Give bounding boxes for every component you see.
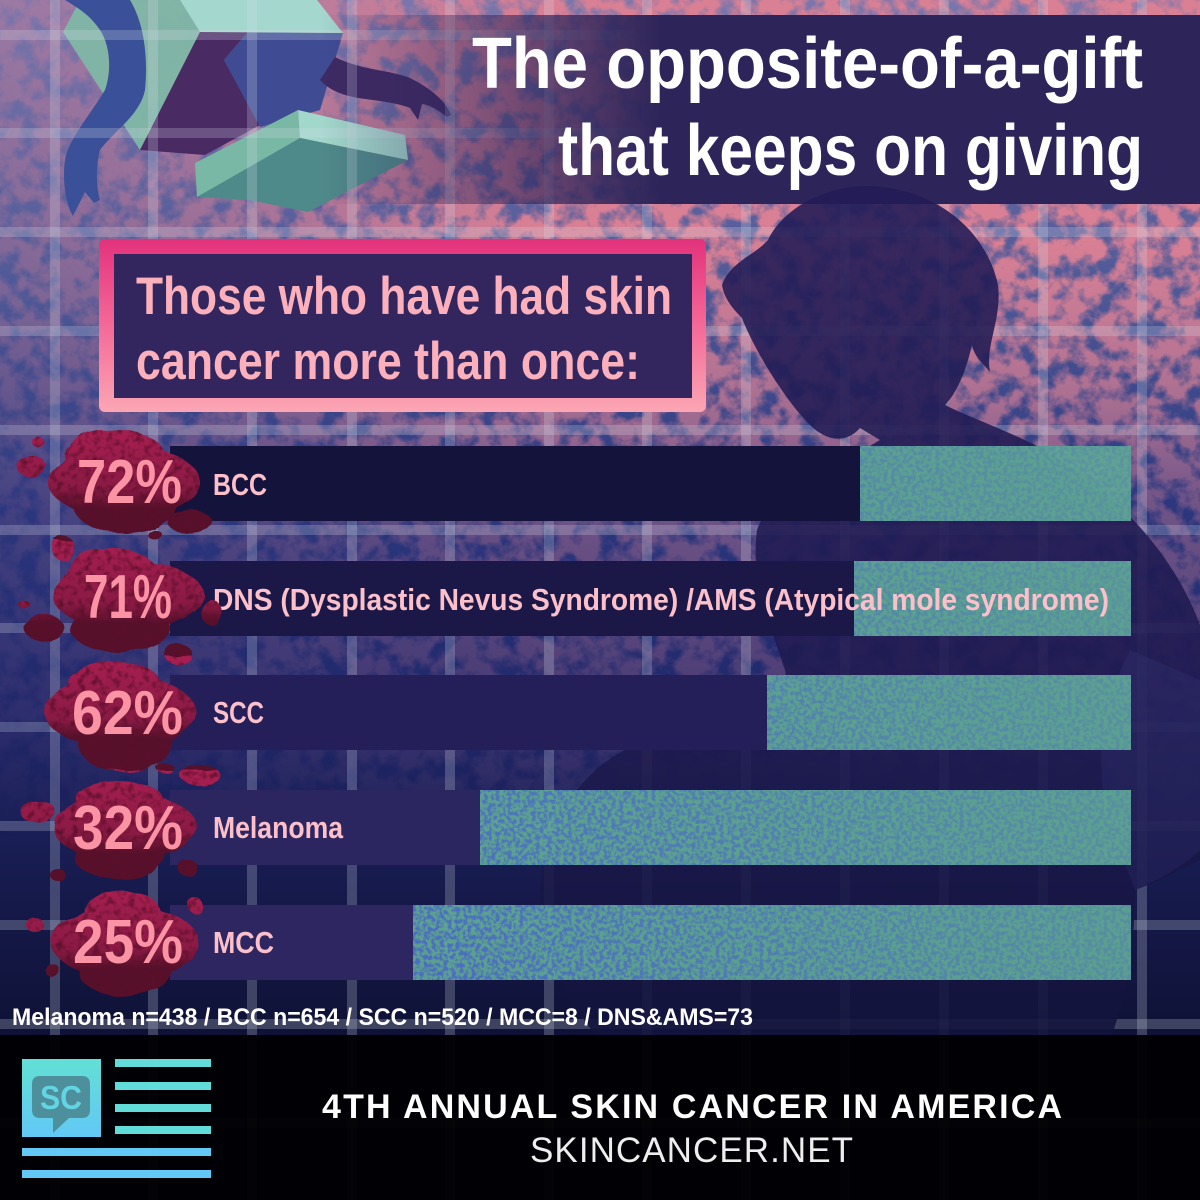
bar labels: SCC — [213, 695, 264, 730]
bar labels — [213, 467, 1109, 960]
bar: Melanoma 32% — [170, 790, 480, 865]
icon: opening gift box — [63, 0, 451, 216]
gift lid left face — [195, 110, 300, 197]
footer website: SKINCANCER.NET — [530, 1131, 853, 1170]
percentage values: 72% — [77, 448, 182, 517]
blob shapes — [17, 430, 222, 996]
bar labels: DNS (Dysplastic Nevus Syndrome) /AMS (Atypical mole syndrome) — [213, 582, 1109, 617]
flag stripes — [115, 1059, 211, 1134]
logo letters: SC — [40, 1079, 82, 1116]
bar speckle texture — [400, 440, 1140, 985]
gift lid right face — [298, 110, 408, 160]
bar labels: BCC — [213, 467, 267, 502]
silhouette of person — [540, 186, 1200, 1040]
subtitle text: Those who have had skin — [136, 267, 672, 326]
bar: SCC 62% — [170, 675, 767, 750]
subtitle text — [136, 267, 672, 391]
percentage values — [72, 448, 183, 977]
gift lid underside — [197, 138, 408, 212]
subtitle text: cancer more than once: — [136, 332, 640, 391]
silhouette body — [540, 186, 1200, 1040]
subtitle frame — [99, 239, 706, 412]
gift box blue face — [224, 32, 343, 127]
sample size footnote: Melanoma n=438 / BCC n=654 / SCC n=520 / MCC=8 / DNS&AMS=73 — [12, 1004, 753, 1031]
gift box dark face — [140, 32, 260, 155]
percentage values: 32% — [73, 794, 183, 863]
title text — [472, 24, 1143, 191]
blue ribbon — [64, 0, 146, 216]
bar chart: repeat skin cancer rates — [170, 440, 1140, 985]
mottled background — [0, 0, 1200, 954]
gift box top face — [180, 0, 343, 33]
icon: SkinCancer.net flag logo — [22, 1059, 211, 1178]
title banner — [320, 15, 1200, 204]
bar: MCC 25% — [170, 905, 413, 980]
logo speech bubble — [32, 1076, 90, 1133]
bar: DNS/AMS 71% — [170, 561, 854, 636]
bar tracks: remaining share — [413, 446, 1131, 980]
gift box left face — [63, 0, 200, 150]
panel: subtitle box — [99, 239, 706, 412]
title text: The opposite-of-a-gift — [472, 24, 1143, 104]
percentage values: 71% — [84, 563, 172, 632]
logo square — [22, 1059, 101, 1137]
bar labels: Melanoma — [213, 810, 344, 845]
bar labels: MCC — [213, 925, 274, 960]
bar: BCC 72% — [170, 446, 860, 521]
footer band — [0, 1035, 1200, 1200]
silhouette arm — [1101, 650, 1200, 890]
dark ribbon — [320, 57, 451, 120]
flag long stripes — [22, 1148, 211, 1178]
percentage values: 25% — [73, 908, 183, 977]
blood-blob percentage badges — [17, 430, 222, 996]
percentage values: 62% — [72, 679, 183, 748]
footer heading: 4TH ANNUAL SKIN CANCER IN AMERICA — [322, 1088, 1062, 1126]
subtitle background — [114, 254, 692, 398]
